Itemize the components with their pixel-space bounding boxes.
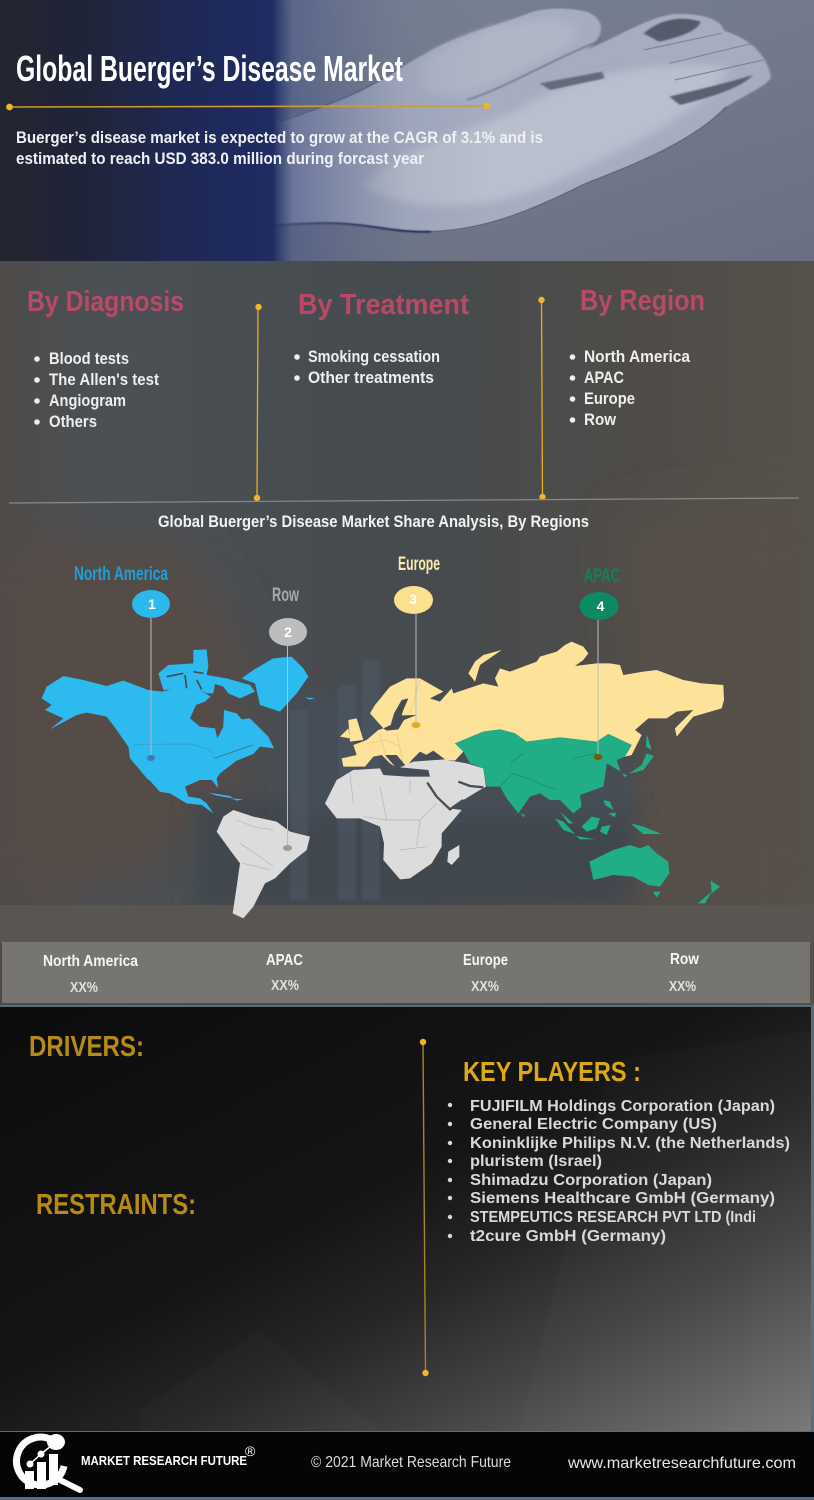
panel: regional shares: North America [43,953,138,970]
region: rest of world [217,759,486,918]
panel: regional shares: XX% [471,978,499,995]
website: www.marketresearchfuture.com [567,1455,796,1472]
panel: regional shares: Europe [463,952,508,969]
list: APAC [584,369,624,387]
list: Smoking cessation [308,348,440,366]
callout: europe: 3 [409,591,417,607]
key players list [448,1098,790,1245]
divider [420,1039,429,1376]
background shapes [140,1030,814,1431]
logo [17,1434,80,1490]
intro text: Buerger’s disease market is expected to grow at the CAGR of 3.1% and is [16,129,543,147]
callout: apac: 4 [597,598,605,614]
copyright: © 2021 Market Research Future [311,1454,511,1471]
map heading: Global Buerger’s Disease Market Share Analysis, By Regions [158,513,589,531]
list: Row [584,411,616,429]
region: asia pacific [455,729,720,903]
list: The Allen's test [49,371,159,389]
callout: north america: 1 [148,596,156,612]
panel: segments and map [0,261,814,1005]
intro text [16,129,543,168]
header panel [0,0,814,261]
panel: regional shares: XX% [271,977,299,994]
key players list: Koninklijke Philips N.V. (the Netherlands) [470,1135,790,1152]
callout: row: 2 [284,624,292,640]
brand name: MARKET RESEARCH FUTURE [81,1454,247,1468]
background photo shapes [0,500,814,943]
list: Blood tests [49,350,129,368]
panel: drivers, restraints and key players [0,1007,814,1431]
key players list: FUJIFILM Holdings Corporation (Japan) [470,1098,775,1115]
key players list: General Electric Company (US) [470,1116,717,1133]
list: Other treatments [308,369,434,387]
image: foot [93,8,771,258]
panel: regional shares [2,942,810,1003]
region: north america [42,649,315,813]
panel: regional shares: XX% [669,978,696,995]
panel: regional shares: XX% [70,979,98,996]
callout: europe [394,554,440,728]
key players list: Siemens Healthcare GmbH (Germany) [470,1190,775,1207]
world map [42,642,724,918]
callout: row: Row [272,585,299,606]
key players list: Shimadzu Corporation (Japan) [470,1172,712,1189]
callout: apac: APAC [584,566,620,587]
list: Europe [584,390,635,408]
callout: europe: Europe [398,554,440,575]
title rule [6,103,490,110]
title: Global Buerger’s Disease Market [16,48,403,89]
panel: by diagnosis [27,286,184,431]
panel: by treatment [294,289,469,387]
restraints heading: RESTRAINTS: [36,1189,196,1221]
callout: north america: North America [74,564,168,585]
panel: regional shares: APAC [266,952,303,969]
list [34,350,159,431]
list [570,348,691,429]
key players list: pluristem (Israel) [470,1153,602,1170]
footer [0,1432,814,1497]
list: North America [584,348,691,366]
key players list: t2cure GmbH (Germany) [470,1228,666,1245]
callout: north america [74,564,170,761]
heading: By Region [580,285,705,317]
list: Others [49,413,97,431]
list [294,348,440,387]
heading: By Treatment [298,289,469,321]
registered mark: ® [245,1443,256,1459]
key players heading: KEY PLAYERS : [463,1056,641,1087]
list: Angiogram [49,392,126,410]
panel: by region [570,285,705,429]
panel: regional shares: Row [670,951,699,968]
callout: apac [580,566,620,760]
intro text: estimated to reach USD 383.0 million during forcast year [16,150,425,168]
column dividers [9,297,799,503]
heading: By Diagnosis [27,286,184,318]
drivers heading: DRIVERS: [29,1031,144,1063]
key players list: STEMPEUTICS RESEARCH PVT LTD (Indi [470,1209,756,1226]
region: europe and russia [340,642,724,767]
callout: row [269,585,307,851]
